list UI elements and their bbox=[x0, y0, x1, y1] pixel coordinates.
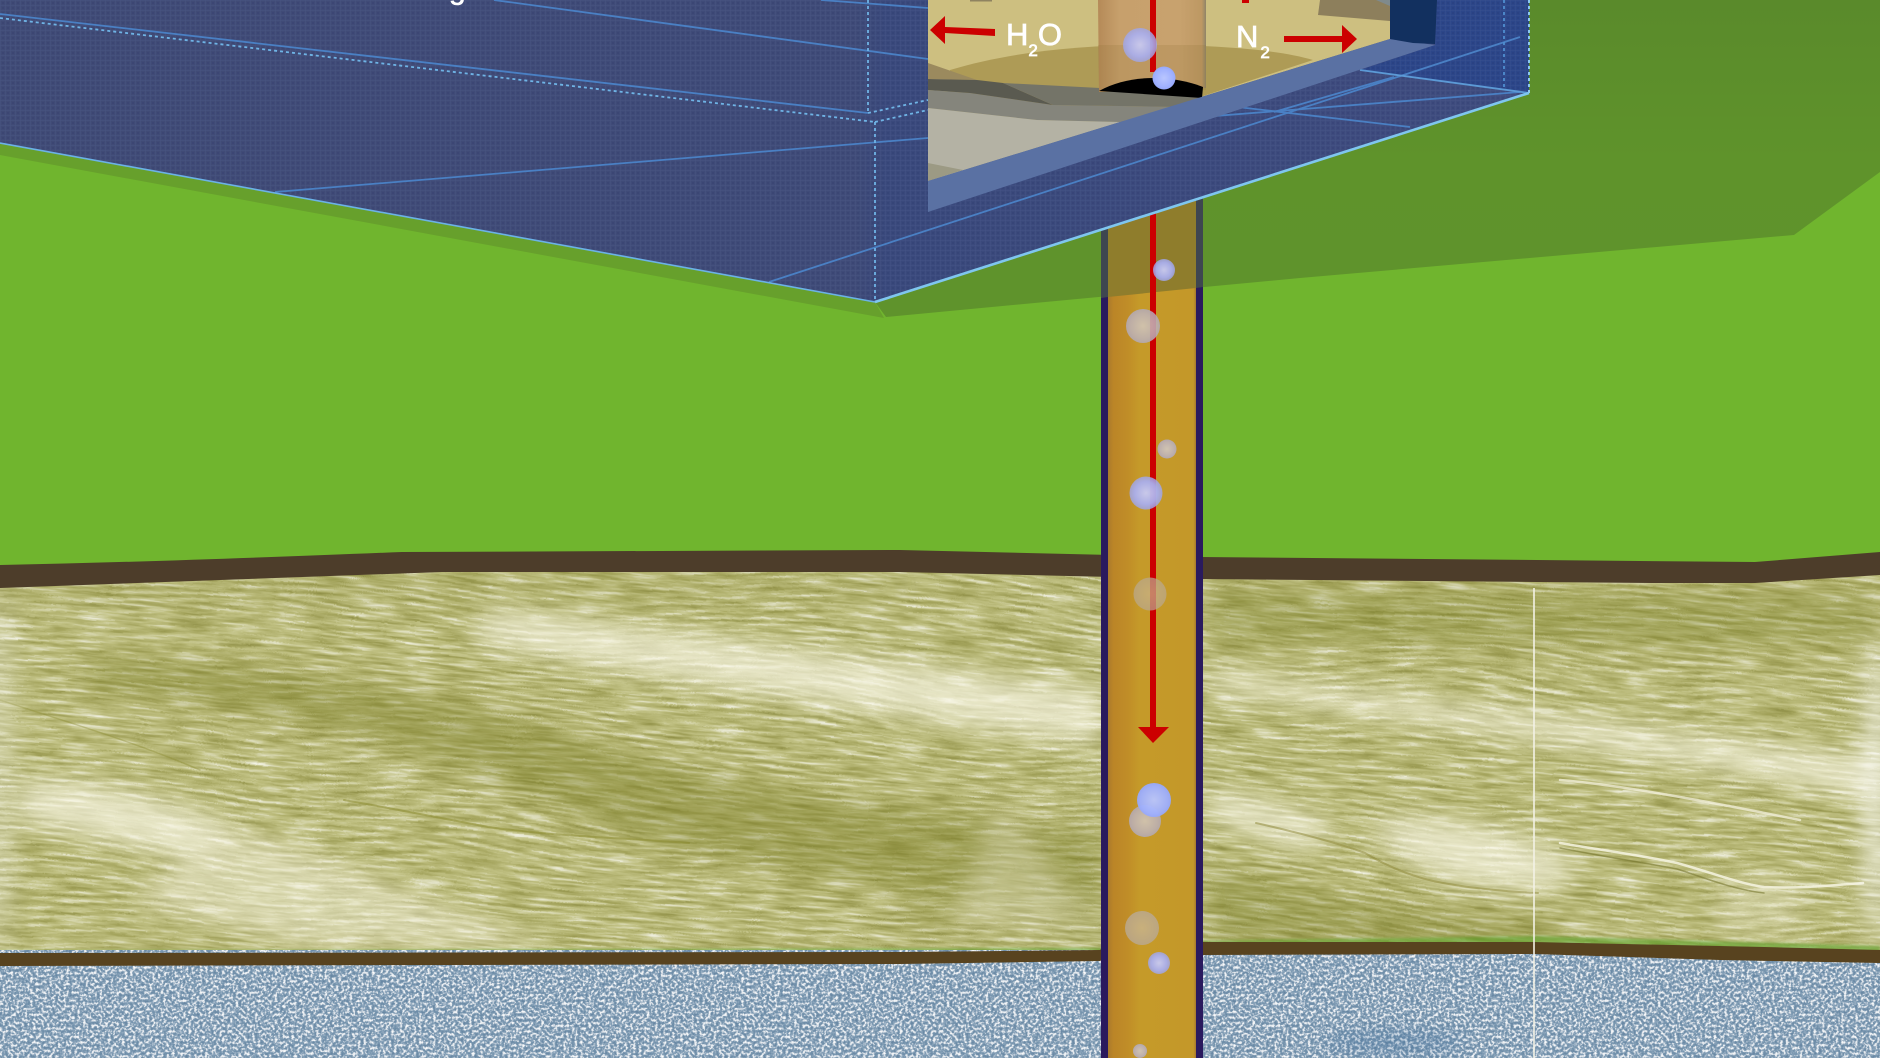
cutaway chamber bbox=[928, 0, 1390, 181]
rock fine strata seams bbox=[0, 700, 1863, 893]
rock edge vignette bbox=[0, 600, 1880, 940]
water vapor label with left arrow: 2 bbox=[1028, 41, 1038, 60]
red flow arrow down the pipe bbox=[1138, 200, 1169, 743]
small red arrow stub bbox=[1242, 0, 1249, 3]
tube base opening bbox=[1099, 78, 1203, 98]
background: green soil layer bbox=[0, 0, 1880, 570]
bubbles in pipe bbox=[1125, 259, 1176, 1058]
chamber bedrock: light grey bbox=[928, 108, 1120, 181]
rock tonal bands: pale seams bbox=[20, 610, 1880, 945]
translucent box structure bbox=[0, 0, 1529, 302]
well pipe bbox=[1101, 170, 1203, 1058]
box cast shadow on the ground bbox=[0, 0, 1880, 318]
pipe section in shadow bbox=[1101, 170, 1203, 298]
chamber bedrock: dark grey bbox=[928, 79, 1053, 105]
chamber bedrock: mid grey bbox=[928, 90, 1180, 122]
granite darker patch bbox=[1325, 1030, 1465, 1054]
rock layer: stratified sediment bbox=[0, 570, 1880, 965]
nitrogen label with right arrow bbox=[1236, 19, 1357, 62]
tube bubbles bbox=[1123, 28, 1176, 90]
lower brown band bbox=[0, 942, 1880, 966]
box dark inner post bbox=[1390, 0, 1437, 44]
nitrogen label with right arrow: 2 bbox=[1260, 43, 1270, 62]
granite layer: blue-grey speckled bbox=[0, 950, 1880, 1058]
green seam above lower band bbox=[1, 934, 1880, 950]
box wireframe lines bbox=[0, 0, 1529, 282]
rock tonal bands: dark olive bbox=[0, 575, 1880, 945]
red flow line in tube bbox=[1150, 0, 1156, 72]
central tube in chamber bbox=[1098, 0, 1206, 98]
water vapor label with left arrow: H bbox=[1006, 17, 1028, 52]
box rim lip bbox=[928, 39, 1435, 212]
chamber floor sediment bbox=[950, 45, 1313, 120]
water vapor label with left arrow: O bbox=[1038, 17, 1062, 52]
water vapor label with left arrow bbox=[930, 16, 1062, 60]
upper brown band bbox=[0, 550, 1880, 588]
nitrogen label with right arrow: N bbox=[1236, 19, 1258, 54]
marker line: vertical white rule bbox=[1533, 588, 1535, 1058]
